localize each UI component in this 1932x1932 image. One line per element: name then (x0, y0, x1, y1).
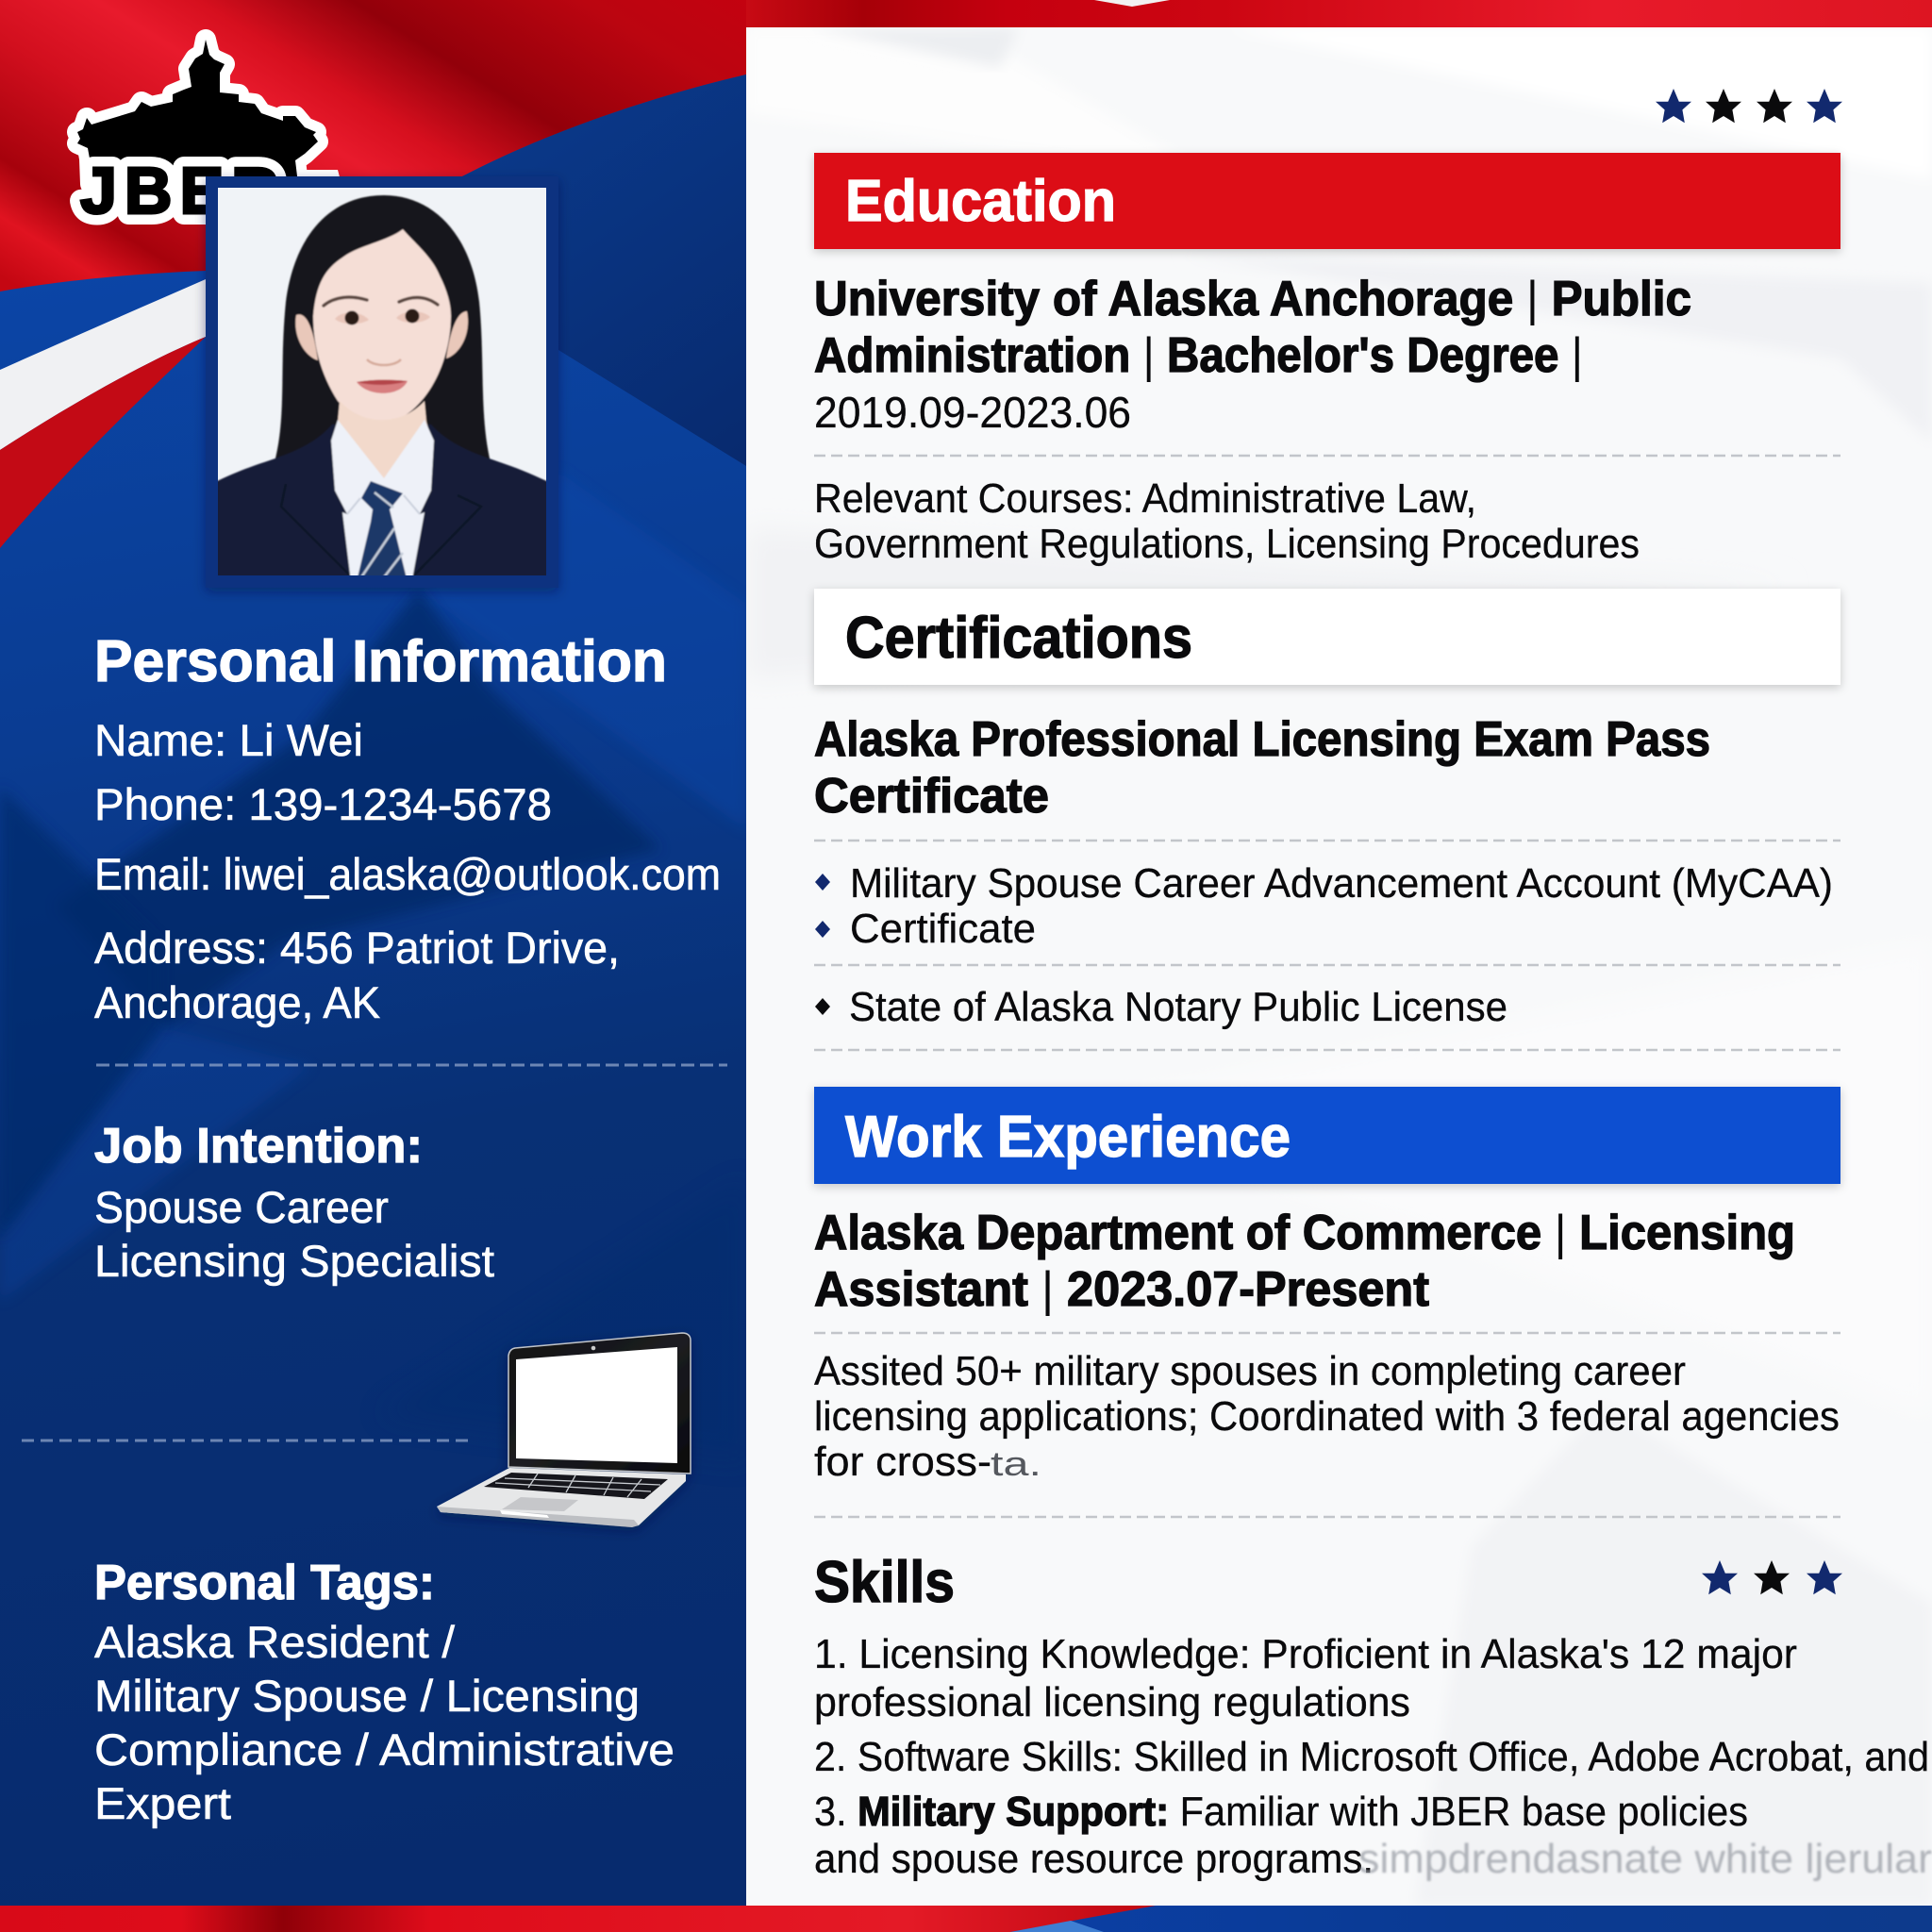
logo tail (300, 170, 341, 184)
face (313, 229, 451, 426)
education heading: Education (845, 169, 1116, 234)
skills heading: Skills (814, 1550, 955, 1615)
certifications bar (814, 589, 1840, 685)
tags line 4: Expert (94, 1778, 231, 1828)
suit (218, 425, 546, 575)
bullet: mycaa: Military Spouse Career Advancement Account (MyCAA) (850, 860, 1833, 907)
ghost text: simpdrendasnate white ljerular (1358, 1836, 1932, 1882)
cert title line 1: Alaska Professional Licensing Exam Pass (814, 712, 1710, 767)
hair (275, 195, 491, 462)
job line 2: Licensing Specialist (94, 1236, 494, 1286)
bullet: notary: State of Alaska Notary Public License (849, 984, 1507, 1030)
school line 2: Administration | Bachelor's Degree | (814, 328, 1583, 383)
logo text: JBER (80, 154, 287, 227)
job line 1: Spouse Career (94, 1182, 389, 1232)
heading: personal information: Personal Information (94, 629, 667, 694)
job line 1: Alaska Department of Commerce | Licensing (814, 1206, 1795, 1260)
panel: work experience (814, 1087, 1840, 1517)
education bar (814, 153, 1840, 249)
neck (334, 401, 432, 481)
heading: job intention: Job Intention: (94, 1119, 423, 1174)
work bar (814, 1087, 1840, 1184)
top red band (746, 0, 1932, 28)
work description line 1: Assited 50+ military spouses in completing career (814, 1348, 1686, 1394)
work description line 3: for cross- (814, 1439, 991, 1485)
email: Email: liwei_alaska@outlook.com (94, 849, 721, 899)
skill 1 line 1: 1. Licensing Knowledge: Proficient in Alaska's 12 major (814, 1631, 1797, 1677)
address line 2: Anchorage, AK (94, 977, 380, 1027)
bottom band (0, 1906, 1932, 1932)
tags line 3: Compliance / Administrative (94, 1724, 675, 1774)
heading: personal tags: Personal Tags: (94, 1556, 435, 1610)
panel: left text (22, 629, 727, 1828)
collar shadow (347, 495, 420, 514)
icon: laptop (437, 1333, 691, 1527)
eyebrows (324, 297, 438, 306)
garbled glyph: ta. (991, 1444, 1041, 1483)
ears (295, 311, 468, 360)
photo: portrait (206, 176, 558, 590)
shirt (331, 420, 434, 590)
stars top (1656, 89, 1842, 123)
icon: pagoda silhouette (77, 40, 318, 184)
bullet: certificate: Certificate (850, 906, 1036, 952)
tags line 1: Alaska Resident / (94, 1617, 456, 1667)
skill 3 line 1: 3. Military Support: Familiar with JBER base policies (814, 1789, 1748, 1835)
panel: certifications (814, 589, 1840, 1050)
address: Address: 456 Patriot Drive, (94, 923, 620, 973)
courses line 2: Government Regulations, Licensing Procedures (814, 521, 1640, 567)
work description line 2: licensing applications; Coordinated with 3 federal agencies (814, 1393, 1840, 1440)
certifications heading: Certifications (845, 606, 1192, 671)
suit lapels (281, 484, 481, 577)
dates: 2019.09-2023.06 (814, 388, 1131, 437)
logo: JBER pagoda (77, 40, 341, 227)
lips (357, 380, 408, 393)
panel: right content background (746, 27, 1932, 1906)
courses line 1: Relevant Courses: Administrative Law, (814, 475, 1476, 522)
tie stripes (361, 492, 403, 577)
background: flag-style left panel (0, 0, 755, 1932)
tags line 2: Military Spouse / Licensing (94, 1671, 640, 1721)
stars skills (1702, 1560, 1842, 1594)
eyes (335, 309, 430, 325)
phone: Phone: 139-1234-5678 (94, 779, 552, 829)
panel: education (814, 153, 1840, 567)
skill 3 line 2: and spouse resource programs. (814, 1836, 1374, 1882)
name: Name: Li Wei (94, 715, 363, 765)
school line 1: University of Alaska Anchorage | Public (814, 272, 1691, 326)
logo text outline: JBER (80, 154, 287, 227)
job line 2: Assistant | 2023.07-Present (814, 1262, 1429, 1317)
tie (357, 480, 408, 575)
panel: skills (814, 1550, 1932, 1882)
work heading: Work Experience (845, 1105, 1291, 1170)
skill 1 line 2: professional licensing regulations (814, 1679, 1410, 1725)
cert title line 2: Certificate (814, 769, 1049, 824)
nose (367, 359, 401, 365)
